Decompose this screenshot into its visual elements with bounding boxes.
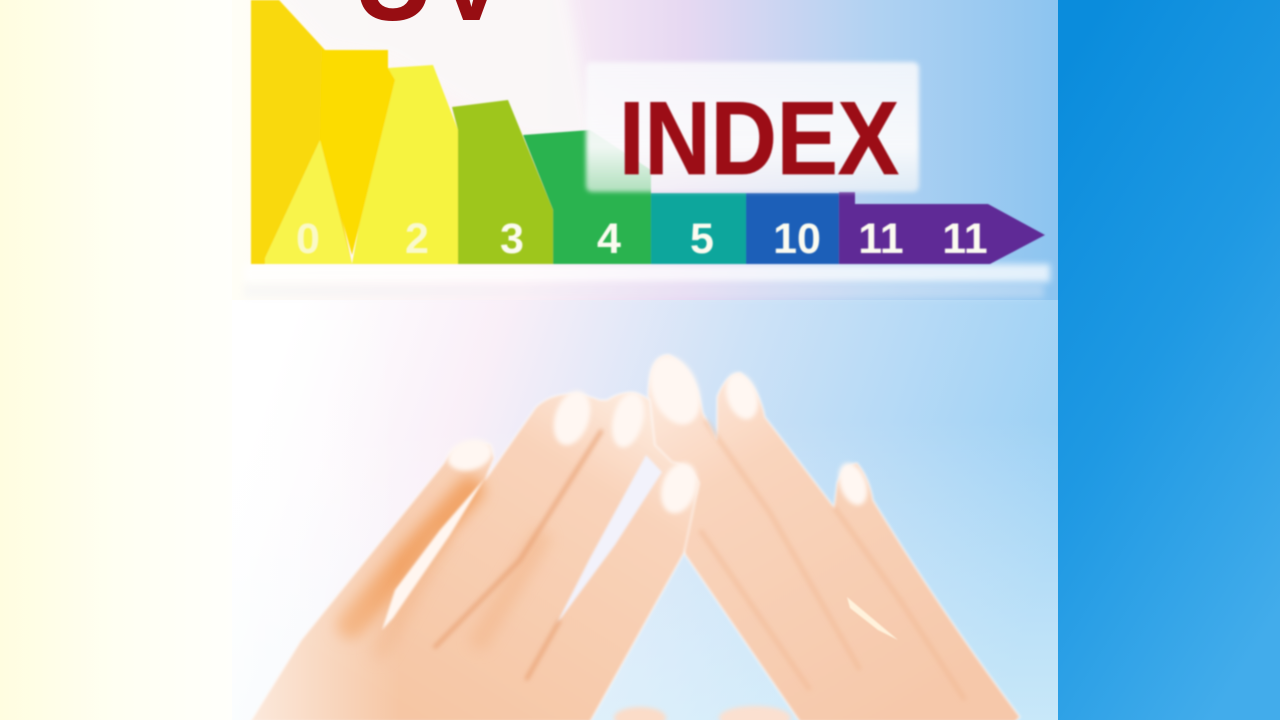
left hand bbox=[250, 392, 699, 720]
scale numbers: 11 bbox=[942, 215, 988, 263]
bar segment: level 3 bbox=[452, 100, 553, 264]
white band under the scale bbox=[244, 264, 1050, 298]
white backing for UV title bbox=[262, 0, 595, 140]
scale numbers: 4 bbox=[597, 215, 621, 263]
bar segment: level 11 arrow bbox=[839, 192, 1045, 264]
light yellow triangle in level 0 bbox=[265, 140, 352, 264]
scale numbers: 11 bbox=[858, 215, 904, 263]
centre sky panel, upper bbox=[232, 0, 1058, 300]
gap between little and ring fingers bbox=[382, 478, 485, 630]
scale numbers: 5 bbox=[690, 215, 714, 263]
crease beside index finger bbox=[526, 620, 560, 680]
scale numbers: 10 bbox=[773, 215, 821, 263]
right blue panel bbox=[1058, 0, 1280, 720]
orange shading on little finger bbox=[350, 490, 470, 625]
white glow over left hand bbox=[232, 320, 400, 720]
white backing for INDEX word bbox=[586, 62, 919, 192]
right hand silhouette bbox=[648, 355, 1020, 720]
gap between middle and index fingers bbox=[556, 455, 662, 625]
bar segment: level 4 bbox=[523, 130, 651, 264]
bar segment: level 10 bbox=[746, 193, 839, 264]
dark yellow wedge bbox=[320, 50, 395, 255]
bar segment: level 2 bbox=[352, 65, 458, 264]
lower knuckles bbox=[614, 706, 791, 720]
left hand silhouette bbox=[250, 392, 699, 720]
scale numbers: 2 bbox=[405, 215, 429, 263]
scale numbers bbox=[296, 215, 988, 263]
scale numbers: 3 bbox=[500, 215, 524, 263]
UV index scale graphic bbox=[244, 0, 1050, 298]
bar segment: level 5 bbox=[651, 193, 746, 264]
left cream panel bbox=[0, 0, 232, 720]
right finger creases bbox=[700, 420, 965, 700]
fingernails bbox=[444, 348, 873, 518]
orange shading on palm bbox=[380, 540, 540, 650]
INDEX heading: INDEX bbox=[619, 81, 899, 197]
crease between ring and middle fingers bbox=[434, 430, 602, 648]
bar segment: level 0 bbox=[251, 0, 352, 264]
scale numbers: 0 bbox=[296, 215, 320, 263]
cream highlight between right fingers bbox=[847, 597, 898, 640]
right hand bbox=[648, 355, 1020, 720]
centre sky panel, lower bbox=[232, 300, 1058, 720]
hands forming a roof bbox=[232, 320, 1020, 720]
